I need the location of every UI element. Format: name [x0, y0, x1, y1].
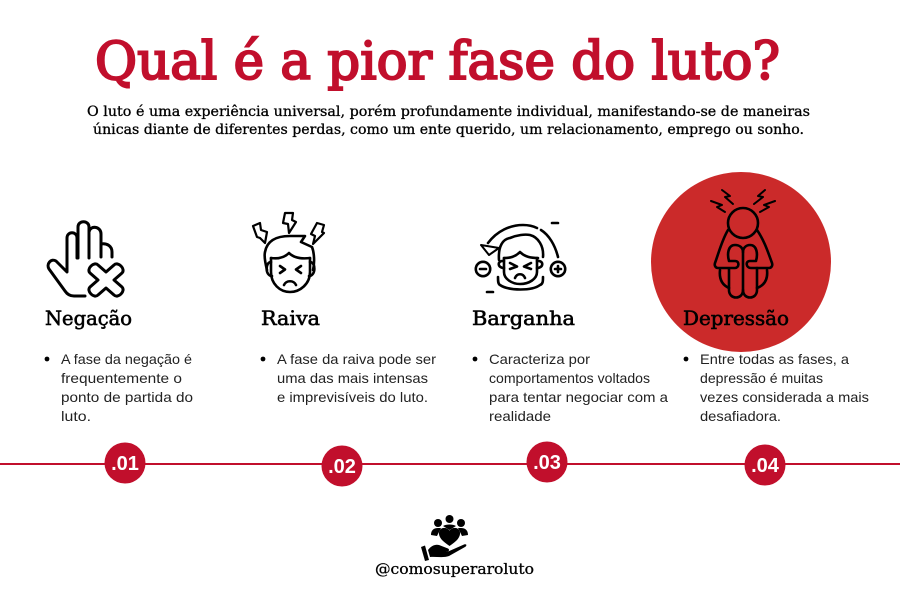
- number badge .01: .01: [111, 453, 139, 475]
- icon: person hugging knees: [711, 190, 775, 298]
- number badge .02: .02: [328, 456, 356, 478]
- bullet text: comportamentos voltados: [489, 370, 650, 386]
- red highlight circle: [651, 172, 831, 352]
- icon: hand with x: [48, 222, 123, 296]
- number badge .03: .03: [533, 452, 561, 474]
- bullet text: [45, 351, 193, 424]
- heading: Barganha: Barganha: [472, 306, 575, 330]
- bullet text: [684, 351, 869, 424]
- number badge .04: [744, 444, 786, 486]
- bullet text: para tentar negociar com a: [489, 389, 668, 405]
- bullet text: A fase da raiva pode ser: [277, 351, 436, 367]
- handle: @comosuperaroluto: [375, 562, 534, 578]
- number badge .04: .04: [751, 455, 780, 477]
- bullet text: realidade: [489, 408, 551, 424]
- bullet text: ponto de partida do: [61, 389, 193, 405]
- panel: negação: [45, 222, 193, 484]
- bullet text: Caracteriza por: [489, 351, 590, 367]
- bullet text: depressão é muitas: [700, 370, 823, 386]
- bullet text: A fase da negação é: [61, 351, 192, 367]
- icon: bargaining face: [476, 223, 565, 292]
- subtitle text block: O luto é uma experiência universal, porém profundamente individual, manifestando-se de maneiras: [87, 104, 810, 120]
- heading: Depressão: Depressão: [683, 306, 789, 330]
- bullet text: Entre todas as fases, a: [700, 351, 849, 367]
- bullet text: [261, 351, 436, 405]
- number badge .02: [322, 446, 362, 486]
- panel: raiva: [253, 213, 436, 486]
- title: Qual é a pior fase do luto?: [95, 32, 780, 92]
- bullet text: e imprevisíveis do luto.: [277, 389, 428, 405]
- bullet text: [473, 351, 668, 424]
- timeline line: [0, 463, 900, 465]
- subtitle text block: [87, 104, 810, 138]
- icon: hand holding heart and people: [421, 515, 468, 561]
- heading: Raiva: Raiva: [261, 306, 320, 330]
- icon: angry face: [253, 213, 324, 292]
- footer: [375, 515, 534, 578]
- bullet text: frequentemente o: [61, 370, 182, 386]
- heading: Negação: Negação: [45, 306, 132, 330]
- bullet text: luto.: [61, 408, 91, 424]
- panel: barganha: [472, 223, 668, 482]
- subtitle text block: únicas diante de diferentes perdas, como um ente querido, um relacionamento, emprego ou sonho.: [93, 122, 804, 138]
- number badge .03: [526, 442, 568, 482]
- bullet text: vezes considerada a mais: [700, 389, 869, 405]
- bullet text: uma das mais intensas: [277, 370, 428, 386]
- panel: depressão: [651, 172, 869, 486]
- bullet text: desafiadora.: [700, 408, 781, 424]
- number badge .01: [104, 442, 146, 484]
